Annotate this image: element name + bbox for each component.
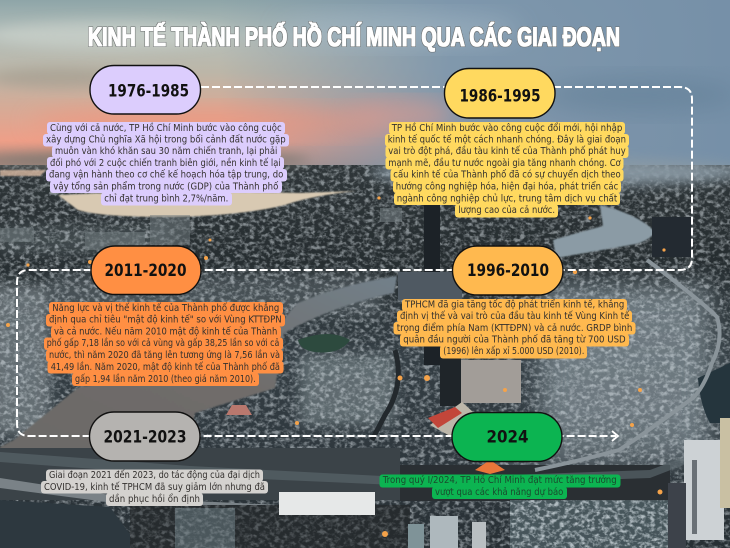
text block: 2011-2020: nước, thì năm 2020 đã tăng lên tương ứng là 7,56 lần và <box>49 350 280 361</box>
text block: 2011-2020: 41,49 lần. Năm 2020, mật độ kinh tế của Thành phố đã <box>51 362 280 373</box>
period pill: 1986-1995: 1986-1995 <box>460 86 540 106</box>
text block: 1986-1995: vai trò đột phá, đầu tàu kinh tế của Thành phố phát huy <box>388 146 626 157</box>
text block: 1996-2010: (1996) lên xấp xỉ 5.000 USD (2010). <box>443 346 584 357</box>
text block: 1976-1985: Cùng với cả nước, TP Hồ Chí Minh bước vào công cuộc <box>50 123 282 134</box>
period pill: 2011-2020: 2011-2020 <box>104 261 186 280</box>
period pill: 1976-1985 <box>90 66 200 114</box>
period pill: 2024 <box>452 412 562 462</box>
text block: 2021-2023: Giai đoạn 2021 đến 2023, do tác động của đại dịch <box>49 470 260 481</box>
text block: 1986-1995: ngành công nghiệp chủ lực, trung tâm dịch vụ chất <box>397 194 618 204</box>
text block: 1976-1985: đối phó với 2 cuộc chiến tranh biên giới, nền kinh tế lại <box>50 158 281 169</box>
period pill: 2011-2020 <box>91 246 201 294</box>
text block: 1986-1995: hướng công nghiệp hóa, hiện đại hóa, phát triển các <box>396 182 618 192</box>
text block: 2021-2023 <box>41 470 268 506</box>
period pill: 1986-1995 <box>444 68 555 118</box>
text block: 1996-2010: quân đầu người của Thành phố đã tăng từ 700 USD <box>403 334 626 346</box>
text block: 2011-2020: Năng lực và vị thế kinh tế của Thành phố được khẳng <box>52 303 279 314</box>
panel: 1976-1985 <box>43 66 289 206</box>
period pill: 1996-2010 <box>452 246 563 295</box>
period pill: 2021-2023 <box>90 412 200 461</box>
text block: 1996-2010: định vị thế và vai trò của đầu tàu kinh tế Vùng Kinh tế <box>400 311 630 322</box>
panel: 2011-2020 <box>44 246 285 386</box>
panel: 1986-1995 <box>385 68 629 218</box>
text block: 1976-1985: muôn vàn khó khăn sau 30 năm chiến tranh, lại phải <box>55 146 277 157</box>
text block: 1996-2010: trọng điểm phía Nam (KTTĐPN) và cả nước. GRDP bình <box>397 323 632 334</box>
period pill: 1996-2010: 1996-2010 <box>467 261 549 280</box>
panel: 2021-2023 <box>41 412 268 506</box>
text block: 2011-2020 <box>44 302 285 386</box>
text block: 1986-1995: TP Hồ Chí Minh bước vào công cuộc đổi mới, hội nhập <box>391 123 622 134</box>
panel: 2024 <box>380 412 620 499</box>
text block: 2011-2020: phố gấp 7,18 lần so với cả vùng và gấp 38,25 lần so với cả <box>47 338 279 349</box>
text block: 1986-1995: kinh tế quốc tế một cách nhanh chóng. Đây là giai đoạn <box>388 134 626 146</box>
text block: 1976-1985: vậy tổng sản phẩm trong nước (GDP) của Thành phố <box>53 182 279 192</box>
text block: 1976-1985: đang vận hành theo cơ chế kế hoạch hóa tập trung, do <box>49 170 284 180</box>
dashed timeline arrow <box>17 87 692 441</box>
period pill: 2024: 2024 <box>486 428 528 446</box>
text block: 1996-2010: TPHCM đã gia tăng tốc độ phát triển kinh tế, khẳng <box>404 300 624 310</box>
text block: 2024 <box>380 474 620 499</box>
text block: 2011-2020: gấp 1,94 lần năm 2010 (theo giá năm 2010). <box>75 374 256 385</box>
text block: 1976-1985: xây dựng Chủ nghĩa Xã hội trong bối cảnh đất nước gặp <box>46 134 286 146</box>
text block: 1996-2010 <box>394 299 636 358</box>
text block: 2024: Trong quý I/2024, TP Hồ Chí Minh đạt mức tăng trưởng <box>382 475 617 486</box>
text block: 1976-1985: chỉ đạt trung bình 2,7%/năm. <box>104 194 228 204</box>
text block: 1986-1995: mạnh mẽ, đầu tư nước ngoài gia tăng nhanh chóng. Cơ <box>388 158 621 169</box>
text block: 1976-1985 <box>43 122 289 206</box>
text block: 2024: vượt qua các khả năng dự báo <box>435 487 564 498</box>
text block: 2021-2023: COVID-19, kinh tế TPHCM đã suy giảm lớn nhưng đã <box>44 482 265 493</box>
text block: 2011-2020: và cả nước. Nếu năm 2010 mật độ kinh tế của Thành <box>54 326 277 338</box>
text block: 1986-1995: cấu kinh tế của Thành phố đã có sự chuyển dịch theo <box>393 170 621 180</box>
period pill: 1976-1985: 1976-1985 <box>108 82 189 100</box>
text block: 2021-2023: dần phục hồi ổn định <box>109 494 200 505</box>
period pill: 2021-2023: 2021-2023 <box>104 428 186 446</box>
panel: 1996-2010 <box>394 246 636 358</box>
text block: 2011-2020: định qua chỉ tiêu "mật độ kinh tế" so với Vùng KTTĐPN <box>49 314 282 326</box>
text block: 1986-1995: lượng cao của cả nước. <box>458 205 555 216</box>
text block: 1986-1995 <box>385 122 629 218</box>
